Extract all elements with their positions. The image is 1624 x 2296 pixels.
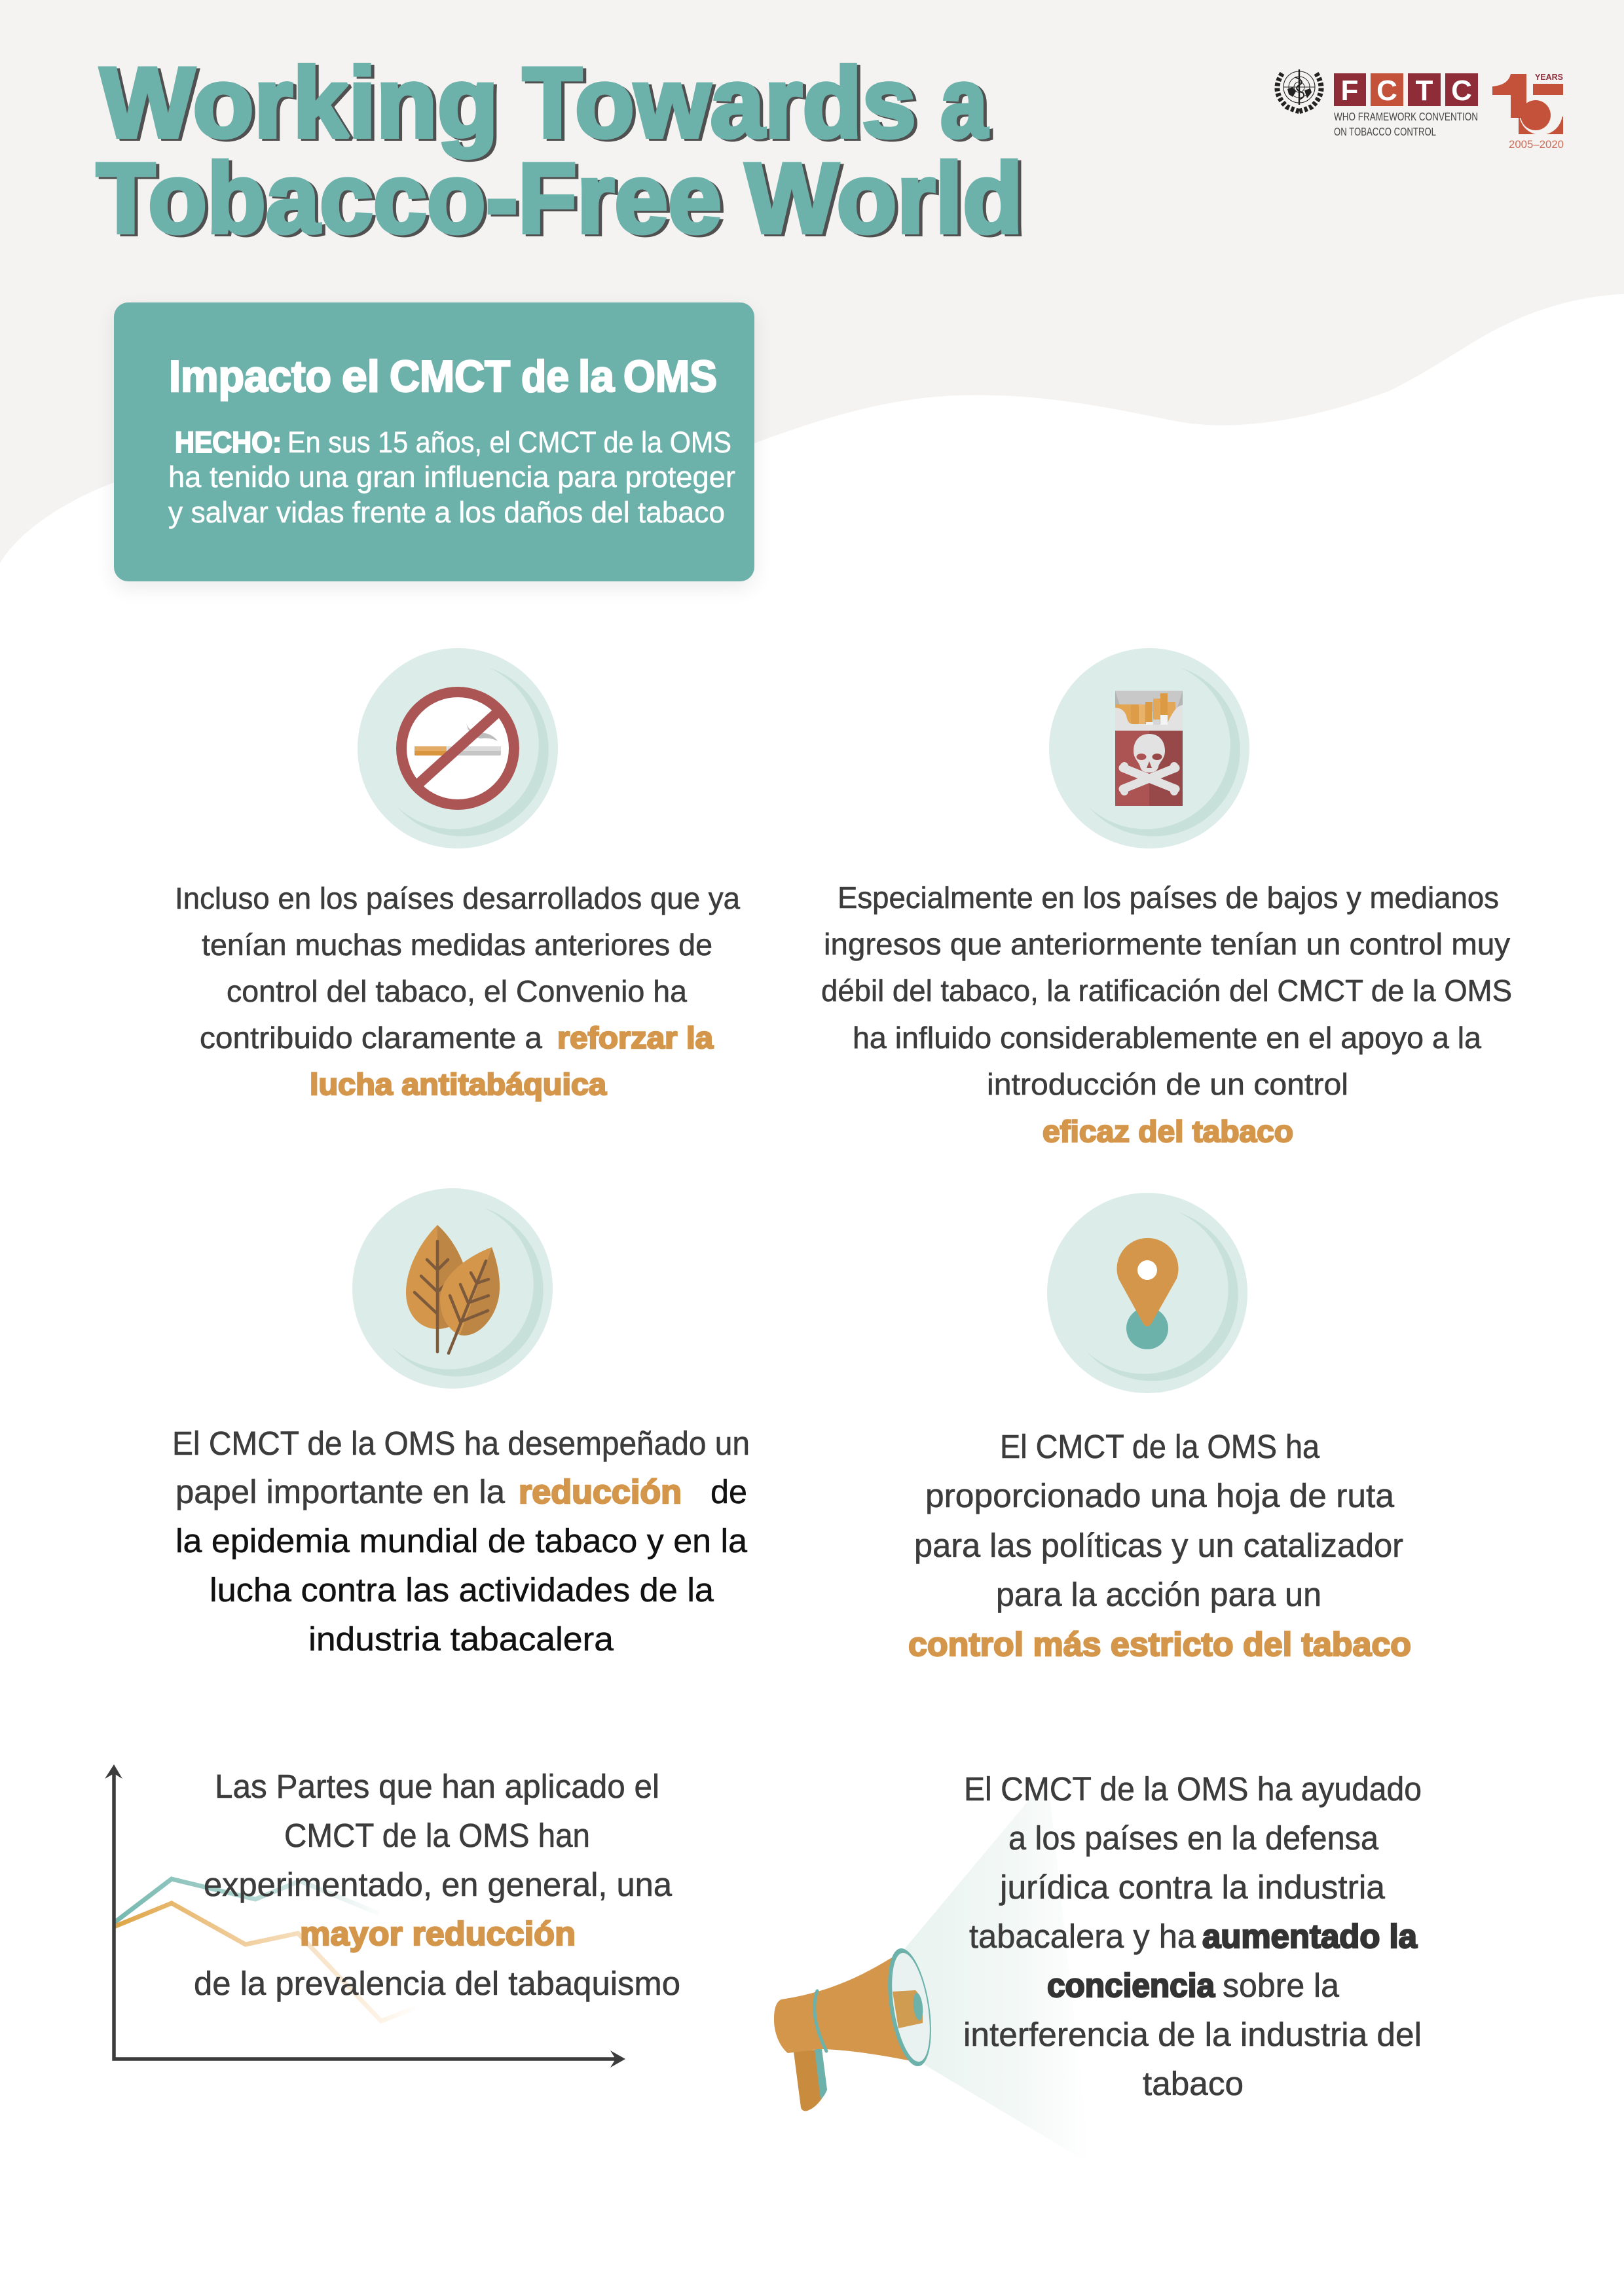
icon: tobacco leaves	[352, 1188, 553, 1389]
text: reduccion epidemia: El CMCT de la OMS ha desempeñado un	[172, 1425, 750, 1462]
text: eficaz del tabaco: ha influido considerablemente en el apoyo a la	[853, 1021, 1481, 1055]
text: reforzar la lucha	[175, 881, 740, 1101]
text: control mas estricto: para las políticas y un catalizador	[914, 1527, 1403, 1564]
panel heading: de	[521, 352, 569, 401]
text: eficaz del tabaco	[821, 881, 1512, 1148]
panel heading	[169, 352, 717, 401]
panel heading: la	[578, 352, 615, 401]
text: eficaz del tabaco: eficaz del tabaco	[1043, 1114, 1293, 1148]
text: defensa juridica: a los países en la defensa	[1008, 1819, 1379, 1857]
title: Working	[100, 47, 498, 158]
text: mayor reduccion: Las Partes que han aplicado el	[215, 1768, 659, 1805]
band	[815, 1991, 826, 2051]
text: control mas estricto: proporcionado una hoja de ruta	[925, 1477, 1395, 1514]
FCTC letter tiles: T	[1416, 75, 1433, 107]
text: reforzar la lucha: Incluso en los países desarrollados que ya	[175, 881, 740, 915]
FCTC letter tiles: C	[1451, 75, 1472, 107]
panel text	[168, 426, 735, 529]
logo caption	[1334, 110, 1478, 138]
text: reduccion epidemia: papel importante en la	[175, 1473, 506, 1510]
text: reduccion epidemia: industria tabacalera	[308, 1620, 614, 1658]
panel text: En sus 15 años, el CMCT de la OMS	[287, 426, 731, 459]
arrow: x axis	[610, 2050, 625, 2068]
text: reforzar la lucha: lucha antitabáquica	[310, 1067, 606, 1101]
icon: number 15	[1492, 74, 1563, 135]
title: Towards	[523, 47, 916, 158]
panel heading: Impacto	[169, 352, 331, 401]
rim	[881, 1945, 938, 2069]
text: reduccion epidemia: la epidemia mundial de tabaco y en la	[175, 1522, 748, 1559]
text: reforzar la lucha: tenían muchas medidas anteriores de	[202, 928, 712, 962]
panel text: y salvar vidas frente a los daños del tabaco	[168, 496, 725, 529]
inner cone	[893, 1990, 923, 2028]
text: reduccion epidemia	[172, 1425, 750, 1658]
icon: no smoking	[358, 648, 558, 848]
teal trend line	[114, 1879, 379, 1923]
title: a	[944, 49, 991, 160]
text: mayor reduccion: experimentado, en general, una	[204, 1866, 673, 1903]
text: mayor reduccion: de la prevalencia del tabaquismo	[194, 1965, 680, 2002]
text: reforzar la lucha: control del tabaco, el Convenio ha	[227, 974, 687, 1008]
text: eficaz del tabaco: Especialmente en los países de bajos y medianos	[838, 881, 1499, 915]
title: World	[745, 143, 1023, 254]
title: Working	[103, 49, 502, 160]
text: reduccion epidemia: reducción	[519, 1473, 682, 1510]
text: defensa juridica: conciencia	[1047, 1967, 1215, 2004]
panel heading: CMCT	[390, 352, 510, 401]
years caption	[1509, 72, 1564, 151]
arrow: y axis	[105, 1764, 122, 1779]
title	[96, 47, 1026, 256]
text: reduccion epidemia: de	[710, 1473, 747, 1510]
text: control mas estricto	[908, 1428, 1411, 1663]
sound cone	[905, 1777, 1090, 2164]
panel heading: OMS	[623, 352, 717, 401]
logo: WHO FCTC 15 years	[1277, 69, 1564, 151]
text: defensa juridica: aumentado la	[1202, 1918, 1418, 1955]
icon: megaphone with sound cone	[774, 1777, 1090, 2164]
title: Tobacco-Free	[100, 145, 725, 256]
text: mayor reduccion	[194, 1768, 680, 2002]
text: control mas estricto: para la acción para un	[996, 1576, 1321, 1613]
text: mayor reduccion: CMCT de la OMS han	[284, 1817, 590, 1854]
icon: cigarette pack with skull	[1049, 648, 1249, 848]
text: defensa juridica: interferencia de la industria del	[963, 2016, 1422, 2053]
text: eficaz del tabaco: ingresos que anteriormente tenían un control muy	[824, 927, 1510, 961]
icon: WHO emblem	[1277, 69, 1321, 111]
panel: impacto	[114, 302, 754, 588]
text: reduccion epidemia: lucha contra las actividades de la	[210, 1571, 714, 1609]
text: control mas estricto: El CMCT de la OMS ha	[1000, 1428, 1320, 1465]
panel text: ha tenido una gran influencia para proteger	[168, 460, 735, 494]
text: reforzar la lucha: reforzar la	[557, 1021, 713, 1055]
text: defensa juridica: tabaco	[1143, 2065, 1244, 2102]
text: mayor reduccion: mayor reducción	[300, 1915, 576, 1952]
axes	[114, 1768, 622, 2059]
cigarettes	[1116, 693, 1175, 726]
FCTC letter tiles: C	[1376, 75, 1397, 107]
panel heading: el	[342, 352, 380, 401]
text: control mas estricto: control más estricto del tabaco	[908, 1626, 1411, 1663]
years caption: YEARS	[1535, 72, 1563, 82]
icon: location pin	[1047, 1193, 1247, 1393]
title: Tobacco-Free	[96, 143, 722, 254]
logo caption: WHO FRAMEWORK CONVENTION	[1334, 110, 1478, 123]
title: World	[748, 145, 1026, 256]
text: defensa juridica: El CMCT de la OMS ha ayudado	[964, 1770, 1422, 1808]
logo caption: ON TOBACCO CONTROL	[1334, 125, 1436, 138]
text: eficaz del tabaco: introducción de un control	[987, 1067, 1348, 1101]
panel text: HECHO:	[175, 426, 282, 459]
FCTC letter tiles	[1334, 73, 1478, 107]
text: defensa juridica: sobre la	[1223, 1967, 1340, 2004]
text: defensa juridica: jurídica contra la industria	[999, 1868, 1386, 1906]
text: defensa juridica: tabacalera y ha	[969, 1918, 1196, 1955]
skull and crossbones	[1120, 734, 1178, 795]
FCTC letter tiles: F	[1341, 75, 1358, 107]
horn body	[774, 1958, 912, 2061]
text: defensa juridica	[963, 1770, 1422, 2102]
years caption: 2005–2020	[1509, 138, 1564, 151]
title: Towards	[526, 49, 919, 160]
title: a	[940, 47, 988, 158]
handle	[794, 2049, 827, 2111]
text: eficaz del tabaco: débil del tabaco, la ratificación del CMCT de la OMS	[821, 974, 1512, 1008]
line chart	[105, 1764, 625, 2068]
orange trend line	[114, 1903, 415, 2021]
text: reforzar la lucha: contribuido claramente a	[200, 1021, 542, 1055]
